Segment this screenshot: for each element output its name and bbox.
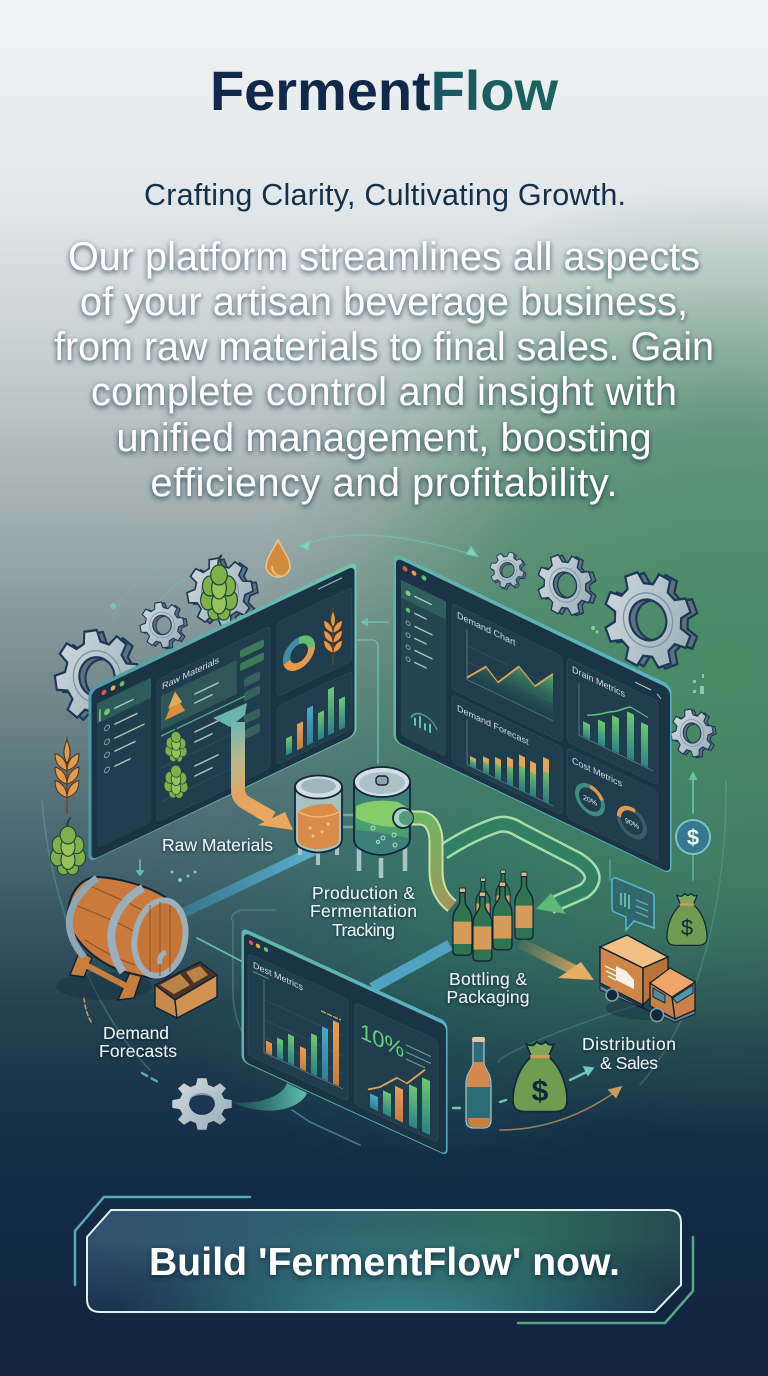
label: demand: Demand (103, 1023, 169, 1043)
corner accents (75, 1197, 693, 1323)
title: FermentFlow (210, 59, 558, 122)
raw materials list (157, 626, 270, 822)
blue conveyor bands (183, 850, 450, 988)
label: bottling (446, 969, 530, 1007)
label: distribution (582, 1034, 676, 1073)
raw materials list: Raw Materials (162, 655, 219, 692)
demand forecast chart (452, 694, 562, 815)
icon: wheat (55, 736, 79, 814)
icon: wooden barrel (56, 877, 191, 1000)
drain metrics chart: Drain Metrics (572, 664, 625, 700)
label: bottling: Bottling & (449, 969, 527, 989)
gears behind dashboard left (49, 552, 263, 732)
panel: raw materials dashboard (88, 561, 356, 863)
label: production (310, 883, 417, 940)
panel: cost dashboard (242, 927, 448, 1156)
icon: wheat in dashboard (324, 608, 342, 665)
icon: coin: $ (687, 825, 699, 850)
cost metrics: Cost Metrics (572, 755, 622, 790)
orange pipe arrow (213, 703, 293, 830)
bar chart: Dest Metrics (253, 960, 303, 994)
bar chart (248, 953, 348, 1101)
button label: Build 'FermentFlow' now. (149, 1241, 620, 1284)
label: demand: Forecasts (99, 1041, 177, 1061)
panel: demand dashboard (394, 552, 672, 875)
drain metrics chart (567, 658, 658, 785)
icon: bottom gear (172, 1078, 232, 1130)
icon: money bag right (667, 893, 707, 945)
connector lines (42, 535, 726, 1145)
demand chart (452, 603, 562, 742)
demand forecast chart: Demand Forecast (457, 703, 529, 748)
icon: chat bubble (612, 878, 654, 930)
icon: fermentation tank orange (295, 776, 342, 865)
cost metrics: 90% (625, 816, 639, 831)
intro text block (54, 235, 714, 505)
tagline: Crafting Clarity, Cultivating Growth. (144, 178, 626, 212)
icon: coin (676, 820, 710, 854)
bar chart (277, 671, 352, 765)
icon: water drop (266, 540, 290, 577)
icon: fermentation tank green (354, 767, 413, 878)
label: production: Tracking (332, 920, 395, 940)
icon: crate (155, 962, 217, 1018)
label: demand (99, 1023, 177, 1061)
icon: money bag (513, 1041, 567, 1112)
call to action button (75, 1197, 693, 1323)
icon: money bag right: $ (681, 915, 693, 940)
intro text block: efficiency and profitability. (150, 461, 618, 505)
icon: hop on gear (201, 555, 237, 620)
intro text block: of your artisan beverage business, (80, 280, 688, 324)
demand chart: Demand Chart (457, 610, 516, 649)
teal swoosh (232, 1083, 307, 1111)
intro text block: Our platform streamlines all aspects (68, 235, 700, 279)
cost metrics: 20% (583, 793, 597, 808)
cost metrics (567, 748, 658, 861)
list icons (164, 685, 188, 810)
growth chart: 10% (360, 1018, 404, 1063)
label: raw materials: Raw Materials (162, 835, 273, 855)
intro text block: complete control and insight with (91, 370, 677, 414)
icon: amber bottle (466, 1037, 491, 1128)
icon: hop left (50, 818, 86, 875)
pipe from fermenter (402, 818, 452, 906)
button body (87, 1210, 681, 1312)
green return arrow (443, 824, 592, 914)
intro text block: unified management, boosting (116, 416, 652, 460)
label: distribution: & Sales (600, 1053, 658, 1073)
faint connector between tanks (338, 815, 358, 827)
label: production: Production & (312, 883, 415, 903)
icon: bottles (453, 870, 533, 961)
sidebar (97, 677, 151, 849)
label: bottling: Packaging (446, 987, 530, 1007)
icon: money bag: $ (532, 1075, 549, 1108)
label: production: Fermentation (310, 901, 417, 921)
label: distribution: Distribution (582, 1034, 676, 1054)
orange arrow to truck (520, 943, 594, 980)
flow diagram (42, 535, 726, 1156)
sparkle dots (110, 603, 704, 882)
donut chart (277, 587, 352, 697)
intro text block: from raw materials to final sales. Gain (54, 325, 714, 369)
icon: delivery truck (600, 935, 695, 1022)
sidebar (401, 580, 446, 757)
gears right (486, 546, 720, 761)
growth chart (355, 1003, 438, 1143)
